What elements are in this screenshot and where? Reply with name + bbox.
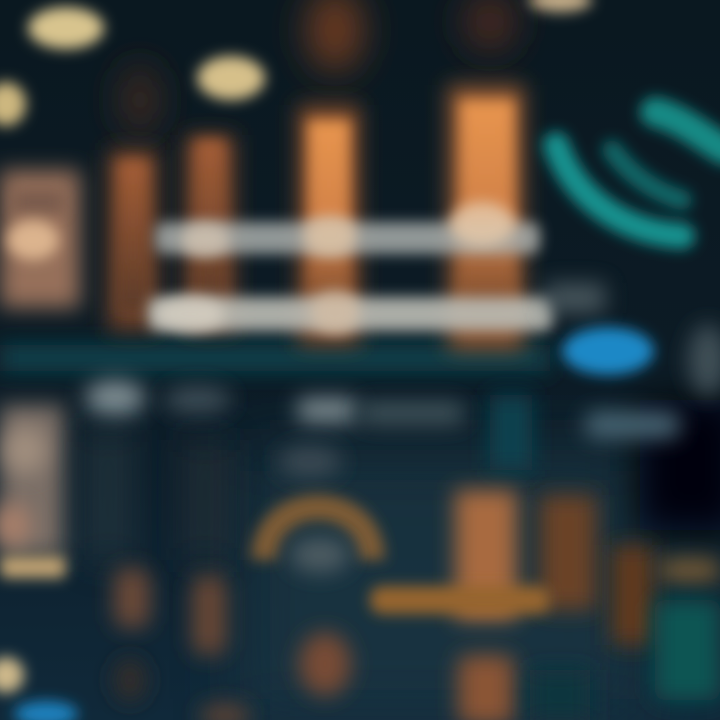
bottom column row xyxy=(114,568,514,720)
orange column chart xyxy=(108,85,524,350)
bottom corner accents xyxy=(0,600,720,720)
dark lower column shadows xyxy=(88,430,225,560)
left photo collage xyxy=(0,170,80,308)
lower orange columns xyxy=(370,490,720,645)
teal swirl icon xyxy=(556,112,720,236)
white horizontal bands xyxy=(148,202,605,334)
lower brown arch icon xyxy=(264,508,372,573)
grey label blobs xyxy=(85,324,720,478)
blue highlight xyxy=(562,327,654,375)
lower left panel xyxy=(0,405,66,578)
top lights xyxy=(0,0,592,136)
